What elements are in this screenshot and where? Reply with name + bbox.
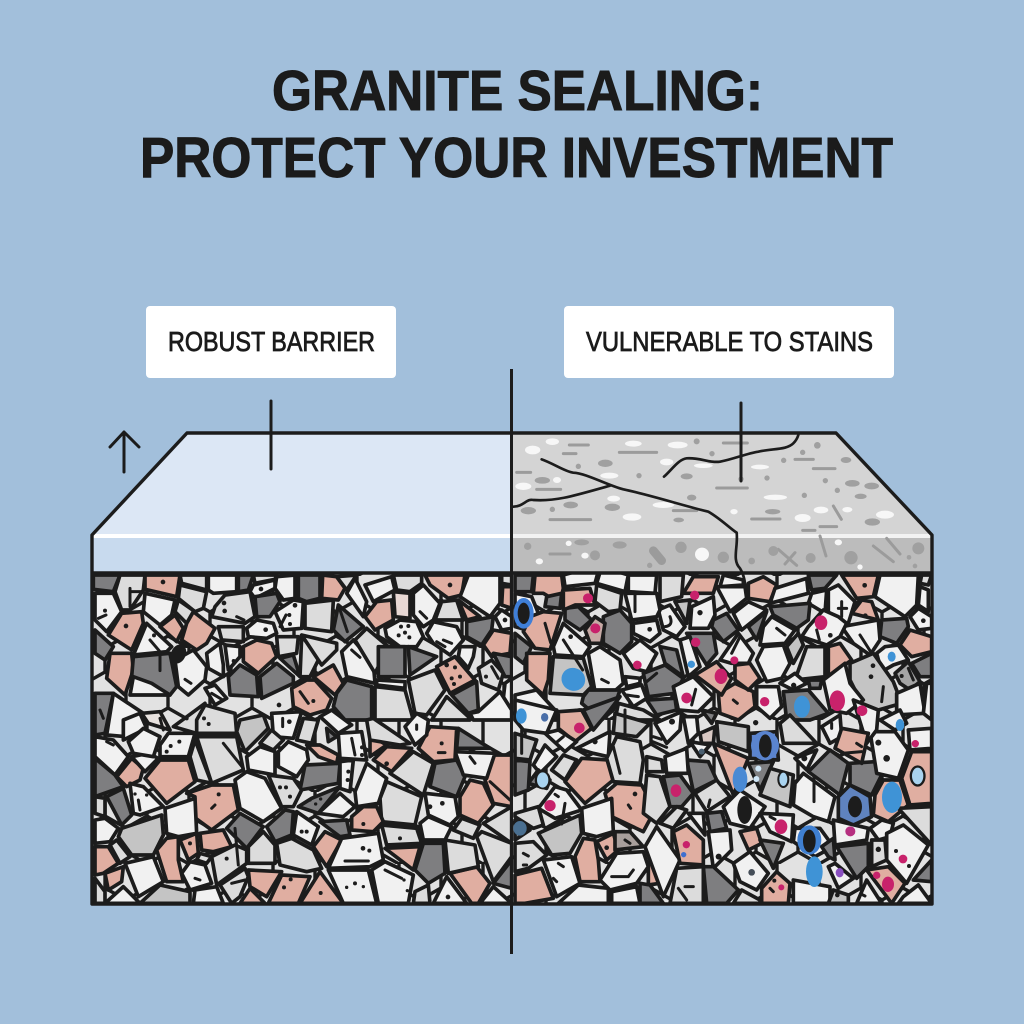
stains and pores: lower: [513, 708, 926, 900]
stains and pores: upper: [514, 583, 926, 718]
grey surface specks: [517, 438, 924, 568]
panel: unsealed stained crystals: [511, 565, 932, 903]
pointer: vulnerable to stains: [740, 403, 742, 481]
icon: up arrow: [110, 432, 139, 472]
unsealed slab surface: [511, 433, 932, 573]
pointer: robust barrier: [270, 401, 272, 469]
label: vulnerable to stains: VULNERABLE TO STAINS: [586, 326, 873, 357]
mineral flecks on sealed side: [98, 580, 507, 707]
label: robust barrier: ROBUST BARRIER: [168, 326, 375, 357]
panel: sealed granite crystals: [92, 573, 512, 903]
title: [140, 59, 893, 190]
title: GRANITE SEALING:: [272, 59, 763, 123]
title: PROTECT YOUR INVESTMENT: [140, 126, 893, 190]
white surface specks: [515, 438, 894, 570]
sealed slab surface: [92, 433, 512, 573]
label: vulnerable to stains: [564, 306, 894, 378]
label: robust barrier: [146, 306, 396, 378]
cracks in unsealed surface: [513, 435, 798, 597]
divider line: [510, 369, 513, 954]
slab outline: [92, 433, 932, 904]
